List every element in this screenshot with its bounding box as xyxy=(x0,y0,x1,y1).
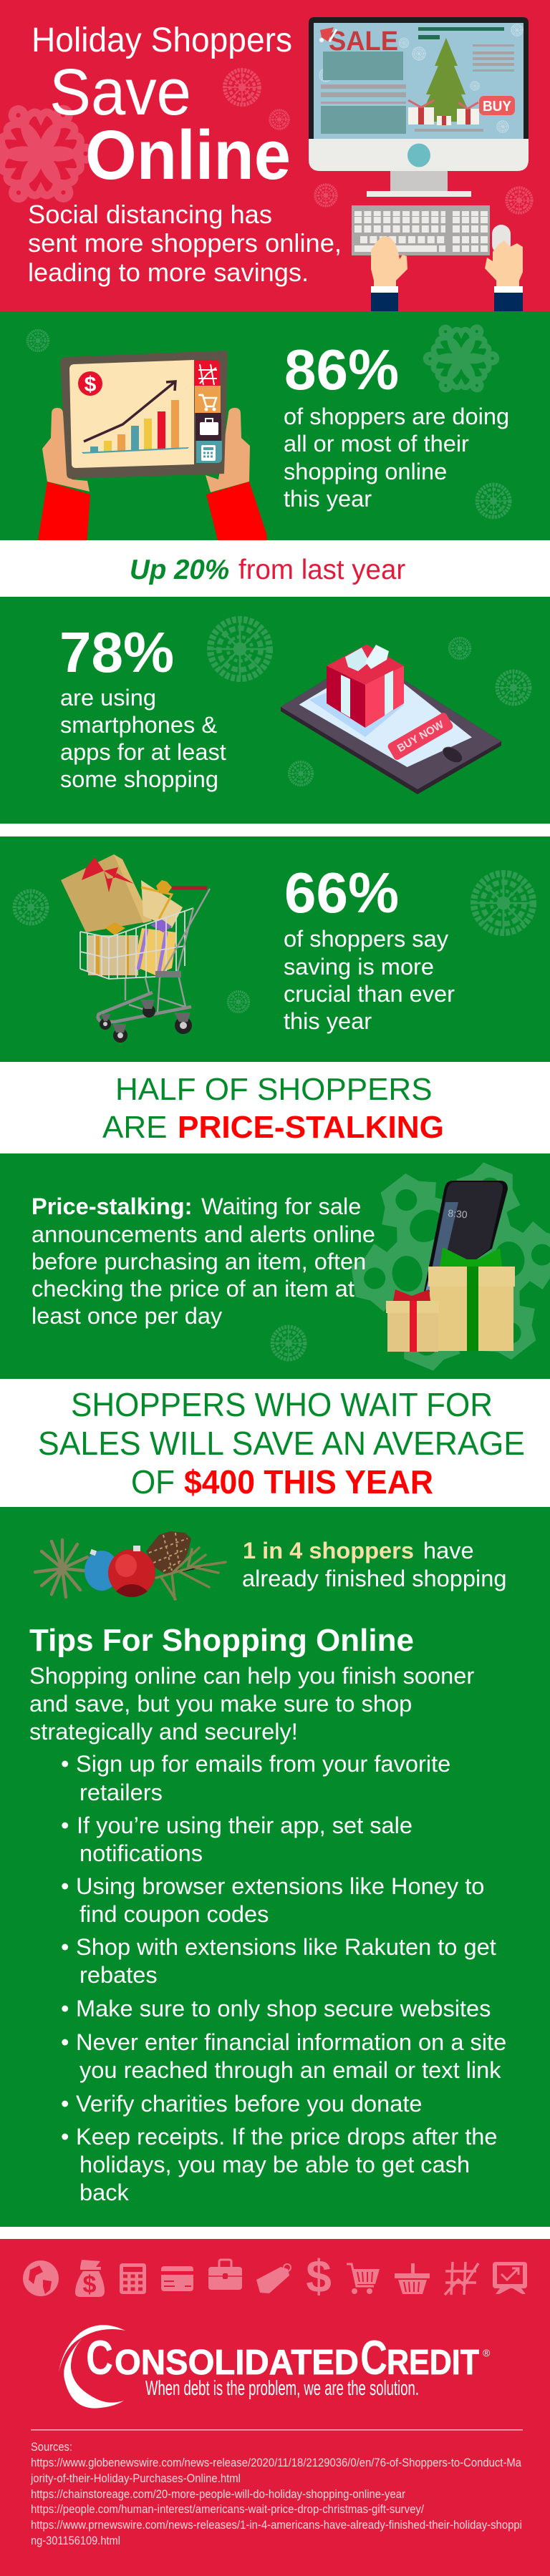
definition text: before purchasing an item, often xyxy=(32,1248,366,1274)
sources: ng-301156109.html xyxy=(31,2534,120,2547)
tips list: • xyxy=(61,2123,69,2150)
buy button: BUY xyxy=(483,99,512,114)
yellow gift xyxy=(134,928,177,975)
tips list: • xyxy=(61,1873,69,1899)
panel: 86 percent stat xyxy=(0,311,550,540)
wheels xyxy=(100,1000,192,1043)
panel: price-stalking definition xyxy=(0,1153,550,1379)
tips list: notifications xyxy=(79,1840,203,1866)
icon row xyxy=(23,2250,527,2302)
tips list: Sign up for emails from your favorite xyxy=(76,1750,450,1777)
decorative gear flake xyxy=(348,1154,550,1379)
large tan gift xyxy=(61,854,152,932)
icon: basket xyxy=(395,2263,430,2294)
sources xyxy=(30,2441,522,2547)
gifts xyxy=(408,100,479,125)
tips list: Keep receipts. If the price drops after the xyxy=(76,2123,498,2150)
title: Save xyxy=(49,56,191,129)
stat number: 78% xyxy=(59,620,174,684)
title: Holiday Shoppers xyxy=(32,21,292,59)
stat text: apps for at least xyxy=(60,738,226,765)
buy now button: BUY NOW xyxy=(395,718,446,755)
banner: half of shoppers xyxy=(0,1062,550,1153)
red bow xyxy=(82,857,134,892)
banner: half of shoppers: HALF OF SHOPPERS xyxy=(115,1072,433,1107)
stat text: this year xyxy=(284,1008,372,1034)
definition text: Price-stalking: xyxy=(32,1193,192,1219)
stat text: of shoppers are doing xyxy=(284,403,509,429)
illustration: smartphone with gift xyxy=(281,645,501,794)
banner: average savings: $400 THIS YEAR xyxy=(184,1463,433,1501)
tips list: Shop with extensions like Rakuten to get xyxy=(76,1933,496,1960)
banner: up 20 percent xyxy=(0,540,550,597)
stat text xyxy=(60,684,226,792)
icon: dollar sign: $ xyxy=(306,2250,332,2302)
tips list: holidays, you may be able to get cash xyxy=(79,2151,470,2177)
panel: tips for shopping online xyxy=(0,1507,550,2227)
illustration: ornaments and pine xyxy=(35,1531,226,1599)
illustration: phone and gifts: 8:30 xyxy=(448,1207,468,1220)
intro text: leading to more savings. xyxy=(28,258,309,287)
icon: calculator xyxy=(120,2263,146,2294)
buy button xyxy=(479,96,515,115)
banner: average savings: SALES WILL SAVE AN AVERAGE xyxy=(38,1425,525,1462)
banner: up 20 percent: from last year xyxy=(238,555,405,585)
banner: average savings xyxy=(0,1379,550,1507)
sources: Sources: xyxy=(31,2441,72,2454)
divider xyxy=(31,2429,523,2430)
logo: consolidated credit: REDIT xyxy=(387,2343,479,2382)
section background xyxy=(0,1153,550,1379)
tips list: you reached through an email or text link xyxy=(79,2057,501,2083)
icon: money bag: $ xyxy=(83,2271,97,2298)
banner: half of shoppers: ARE xyxy=(102,1110,167,1145)
intro text: Social distancing has xyxy=(28,200,272,229)
icon: presentation board xyxy=(493,2262,527,2294)
icon: shopping cart xyxy=(347,2264,380,2294)
section background xyxy=(0,311,550,540)
panel: 66 percent stat xyxy=(0,836,550,1062)
tips intro xyxy=(29,1662,474,1745)
buy now button xyxy=(387,711,454,761)
banner: half of shoppers: PRICE-STALKING xyxy=(178,1110,444,1145)
dollar badge: $ xyxy=(85,373,97,396)
tips intro: strategically and securely! xyxy=(29,1718,298,1745)
footer background xyxy=(0,2239,550,2576)
tips heading: Tips For Shopping Online xyxy=(29,1623,414,1658)
stat text: all or most of their xyxy=(284,430,469,457)
icon: money bag xyxy=(75,2260,105,2298)
tips list: Make sure to only shop secure websites xyxy=(76,1995,491,2021)
icon: price tag xyxy=(256,2264,291,2293)
tips intro: and save, but you make sure to shop xyxy=(29,1690,412,1717)
christmas tree xyxy=(418,38,473,122)
panel: hero header xyxy=(0,0,550,312)
illustration: shopping cart with gifts xyxy=(61,854,210,1043)
icon: credit card xyxy=(161,2266,193,2291)
section background xyxy=(0,1507,550,2227)
one in four stat: 1 in 4 shoppers xyxy=(243,1537,414,1563)
tips list: • xyxy=(61,1812,69,1838)
tips intro: Shopping online can help you finish sooner xyxy=(29,1662,474,1689)
definition text: announcements and alerts online xyxy=(32,1221,375,1247)
tips list: • xyxy=(61,1933,69,1960)
icon: globe xyxy=(23,2260,59,2296)
wire basket xyxy=(80,908,193,979)
logo: consolidated credit xyxy=(59,2325,491,2409)
beige gift xyxy=(88,935,138,975)
gift box xyxy=(327,645,404,728)
tips list xyxy=(61,1750,506,2205)
one in four stat: have xyxy=(423,1537,474,1563)
stat text: this year xyxy=(284,485,372,512)
tips list: retailers xyxy=(79,1779,163,1805)
tips list: Using browser extensions like Honey to xyxy=(76,1873,484,1899)
definition text xyxy=(32,1193,375,1329)
tips list: Verify charities before you donate xyxy=(76,2090,423,2117)
stat number: 86% xyxy=(284,338,399,401)
icon: stock chart xyxy=(445,2262,478,2295)
stat text: are using xyxy=(60,684,156,711)
stat text: some shopping xyxy=(60,766,218,792)
stat text: smartphones & xyxy=(60,711,217,738)
tips list: • xyxy=(61,1995,69,2021)
definition text: least once per day xyxy=(32,1302,223,1329)
illustration: hands holding tablet xyxy=(38,351,266,540)
section background xyxy=(0,836,550,1062)
logo: consolidated credit: ONSOLIDATED xyxy=(115,2343,359,2382)
illustration: keyboard xyxy=(352,205,511,255)
one in four stat xyxy=(242,1537,506,1591)
sources: jority-of-their-Holiday-Purchases-Online.html xyxy=(30,2472,241,2485)
trend arrow xyxy=(84,381,175,441)
dollar badge xyxy=(78,371,102,396)
stat text: of shoppers say xyxy=(284,925,449,952)
illustration: desktop computer xyxy=(309,17,529,197)
stat text: crucial than ever xyxy=(284,980,455,1007)
tips list: back xyxy=(79,2179,130,2205)
tips list: If you’re using their app, set sale xyxy=(77,1812,412,1838)
sources: https://people.com/human-interest/americans-wait-price-drop-christmas-gift-survey/ xyxy=(31,2503,424,2516)
one in four stat: already finished shopping xyxy=(242,1565,506,1591)
logo: consolidated credit: ® xyxy=(483,2347,491,2358)
definition text: Waiting for sale xyxy=(201,1193,361,1219)
screen banner: sale: SALE xyxy=(329,26,398,57)
title: Online xyxy=(85,116,291,194)
illustration: phone and gifts xyxy=(386,1181,515,1352)
banner: average savings: OF xyxy=(131,1463,175,1501)
stat text: saving is more xyxy=(284,953,434,980)
definition text: checking the price of an item at xyxy=(32,1275,354,1302)
gold gift xyxy=(141,880,183,928)
hero background xyxy=(0,0,550,311)
stat text xyxy=(284,403,509,512)
tips list: find coupon codes xyxy=(79,1901,269,1927)
cart frame xyxy=(125,889,210,1014)
icon: briefcase xyxy=(208,2260,242,2290)
banner: up 20 percent: Up 20% xyxy=(130,555,229,585)
section background xyxy=(0,597,550,824)
tips list: rebates xyxy=(79,1961,158,1988)
tips list: • xyxy=(61,2090,69,2117)
panel: footer xyxy=(0,2239,550,2576)
intro text: sent more shoppers online, xyxy=(28,228,342,258)
bar chart rising xyxy=(82,400,189,454)
logo: consolidated credit: C xyxy=(86,2331,113,2385)
phone home button xyxy=(440,744,465,766)
tips list: Never enter financial information on a site xyxy=(76,2029,506,2055)
panel: 78 percent stat xyxy=(0,597,550,824)
sources: https://chainstoreage.com/20-more-people-will-do-holiday-shopping-online-year xyxy=(31,2488,405,2501)
handle xyxy=(172,886,207,890)
stat number: 66% xyxy=(284,861,399,924)
banner: average savings: SHOPPERS WHO WAIT FOR xyxy=(71,1386,493,1423)
illustration: hands xyxy=(371,236,523,312)
large gift xyxy=(428,1247,515,1351)
tips list: • xyxy=(61,1750,69,1777)
stat text xyxy=(284,925,455,1034)
tips list: • xyxy=(61,2029,69,2055)
stat text: shopping online xyxy=(284,458,447,484)
tablet side icons xyxy=(194,360,222,463)
intro text xyxy=(28,200,342,287)
title xyxy=(32,21,292,194)
small gift xyxy=(386,1289,439,1352)
logo: consolidated credit: C xyxy=(360,2331,387,2385)
